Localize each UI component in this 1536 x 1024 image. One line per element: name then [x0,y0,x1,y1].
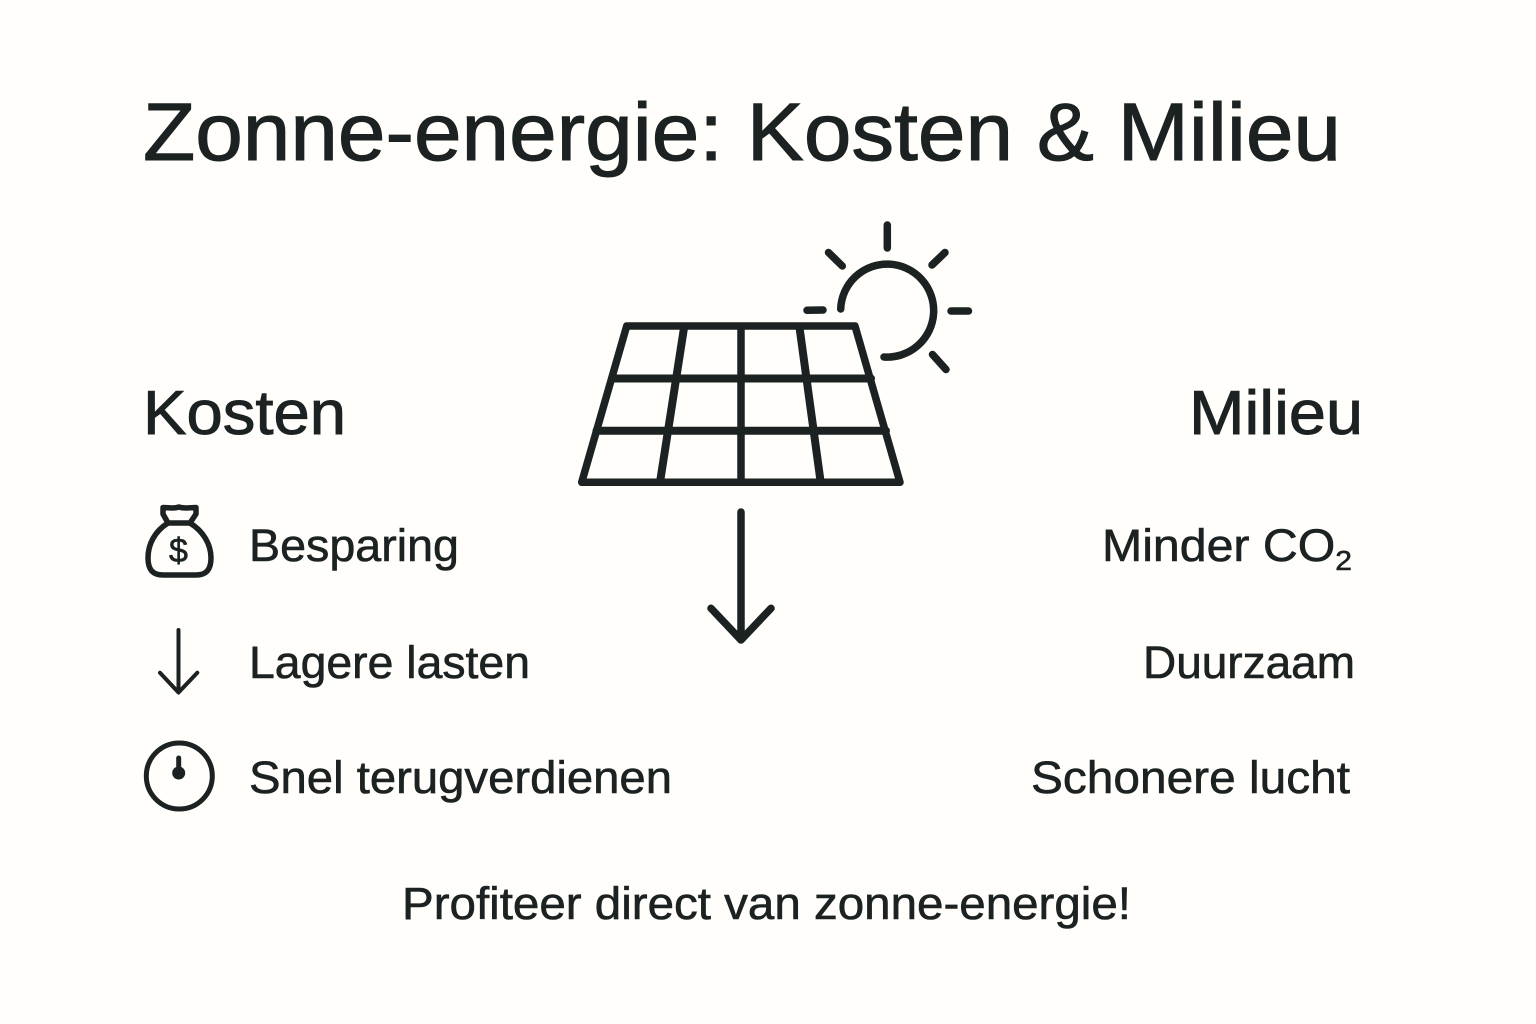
icon: money bag [148,507,211,575]
icon: solar panel [582,326,900,482]
text: Schonere lucht: Schonere lucht [1031,752,1351,803]
icon: money bag: $ [169,532,188,570]
heading: Kosten: Kosten [143,379,346,448]
heading: Milieu: Milieu [1189,379,1363,448]
icon: down arrow [160,630,197,692]
text: Snel terugverdienen: Snel terugverdienen [249,752,672,803]
title: Zonne-energie: Kosten & Milieu [143,87,1341,178]
text: Duurzaam: Duurzaam [1143,637,1355,688]
icon: sun [807,225,968,370]
text: Minder CO2: Minder CO [1102,520,1320,571]
text: Minder CO2: 2 [1335,545,1352,576]
arrow: central down arrow [711,512,771,640]
panel: Milieu [1031,379,1363,803]
text: Lagere lasten: Lagere lasten [249,637,530,688]
footer call to action: Profiteer direct van zonne-energie! [402,878,1131,929]
panel: Kosten [143,379,672,809]
icon: clock [146,743,212,809]
text: Besparing: Besparing [249,520,459,571]
